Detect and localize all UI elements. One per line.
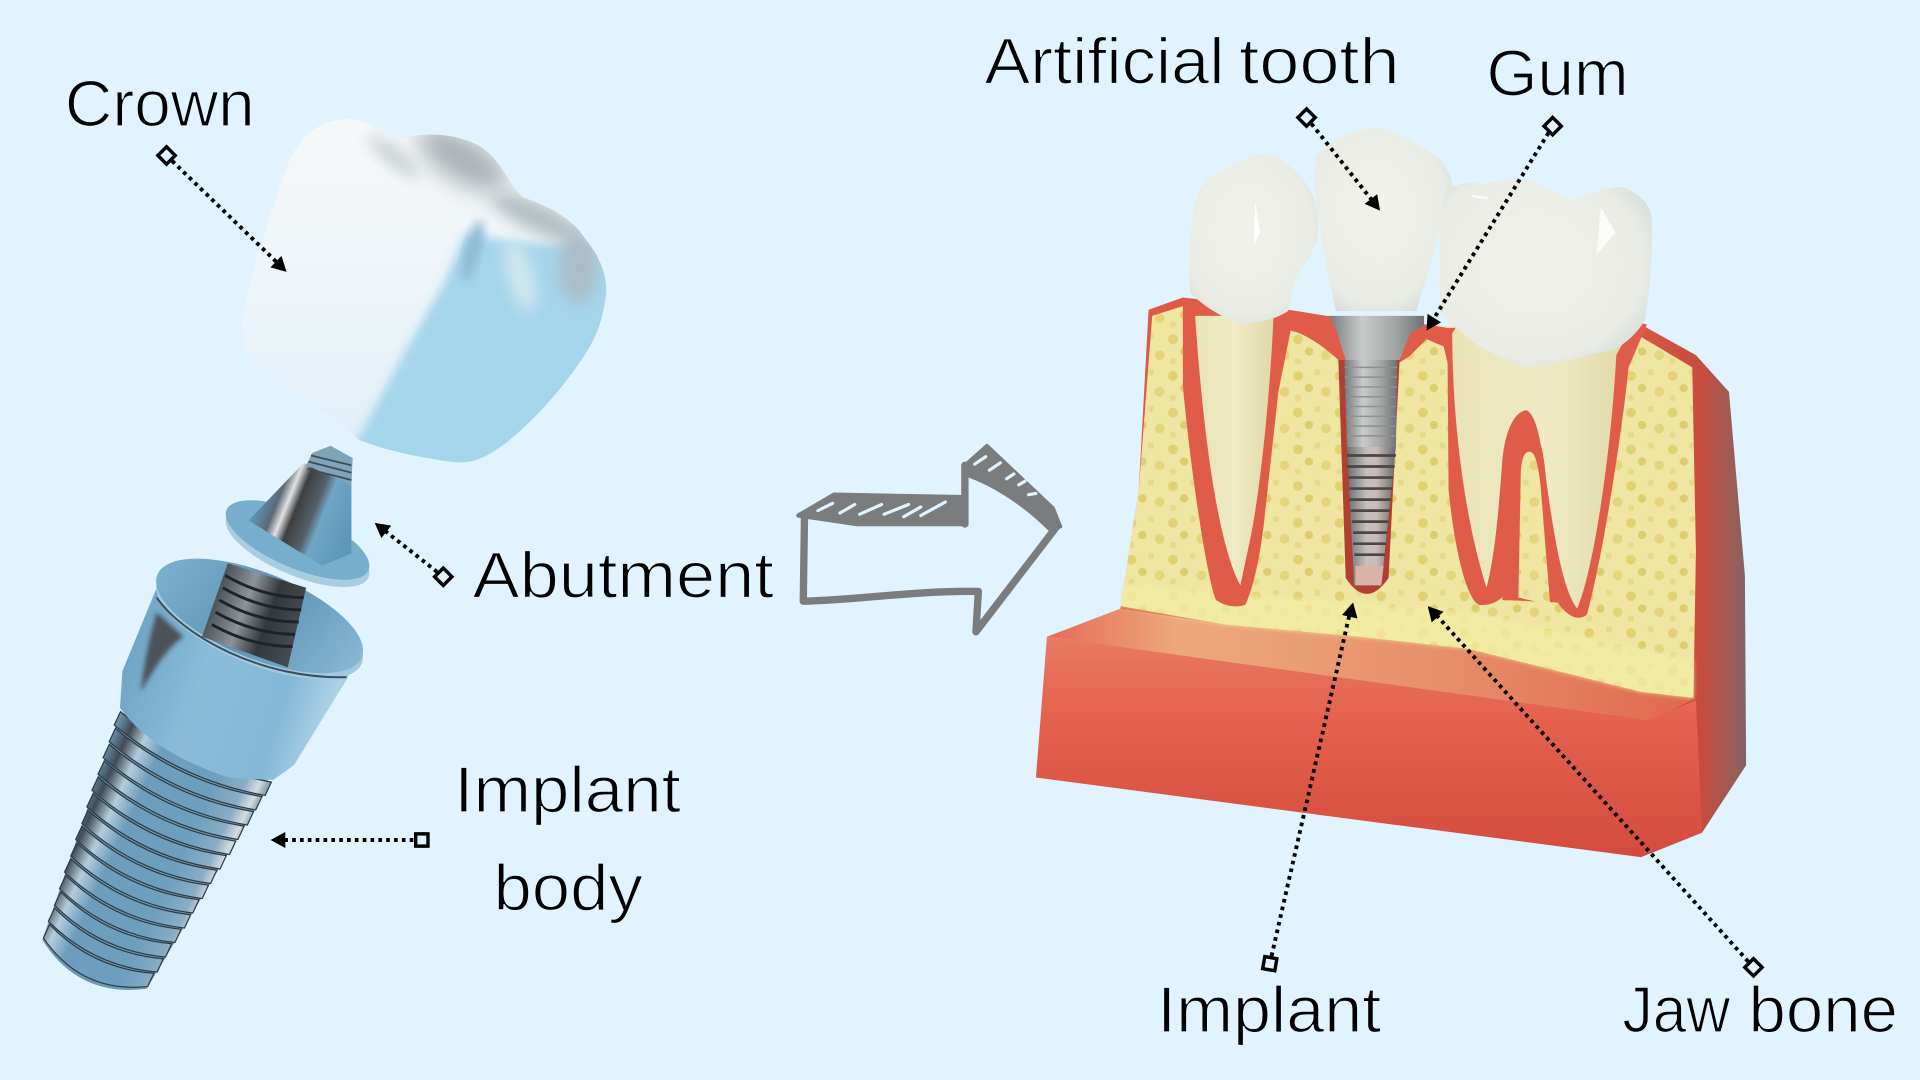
label: Implant body: Implant — [454, 753, 681, 826]
illustration: abutment — [202, 446, 380, 667]
icon: hand-drawn arrow — [798, 446, 1060, 632]
label: Implant body — [454, 753, 681, 924]
model: bone between molar roots — [1518, 452, 1550, 605]
label: Artificial tooth: tooth — [1239, 24, 1400, 97]
callout: Implant body pointer — [271, 832, 428, 848]
model: gum around left tooth and implant — [1183, 300, 1449, 607]
model: lower bone lighter band — [1120, 585, 1693, 698]
label: Jaw bone: bone — [1749, 973, 1898, 1046]
callout: Jaw bone pointer — [1422, 601, 1762, 976]
label: Implant body: body — [493, 851, 643, 924]
model: implant smooth collar — [1344, 360, 1397, 447]
model: abutment collar — [1329, 316, 1424, 360]
label: Implant: Implant — [1157, 973, 1381, 1046]
label: Artificial tooth: Artificial — [984, 24, 1224, 97]
illustration: dental crown — [242, 119, 606, 462]
model: implant lower thread — [1347, 447, 1396, 585]
illustration: implant collar — [120, 535, 378, 780]
callout: Crown pointer — [158, 147, 292, 278]
model: left tooth crown — [1189, 153, 1318, 324]
model: base top surface — [1047, 609, 1696, 722]
model: gum arch between molar roots — [1502, 431, 1558, 602]
model: yellow bone — [1120, 306, 1696, 698]
label: Crown: Crown — [65, 67, 255, 140]
model: red side body — [1102, 298, 1746, 857]
model: root of left tooth — [1195, 316, 1273, 585]
model: molar roots — [1452, 326, 1631, 609]
model: implant socket — [1338, 360, 1400, 594]
label: Jaw bone: Jaw — [1622, 973, 1731, 1046]
callout: Artificial tooth pointer — [1298, 109, 1386, 216]
callout: Abutment pointer — [370, 517, 452, 585]
label: Gum: Gum — [1487, 37, 1629, 110]
callout: Implant pointer — [1263, 601, 1361, 971]
model: gum around molar roots — [1447, 321, 1647, 618]
illustration: dental model cross-section — [1036, 127, 1746, 857]
callout: Gum pointer — [1420, 117, 1561, 335]
model: central artificial tooth — [1315, 127, 1452, 311]
label: Abutment: Abutment — [473, 539, 774, 612]
model: right molar crown — [1439, 179, 1652, 367]
illustration: implant body threads — [11, 712, 271, 1016]
model: base front — [1036, 637, 1702, 857]
